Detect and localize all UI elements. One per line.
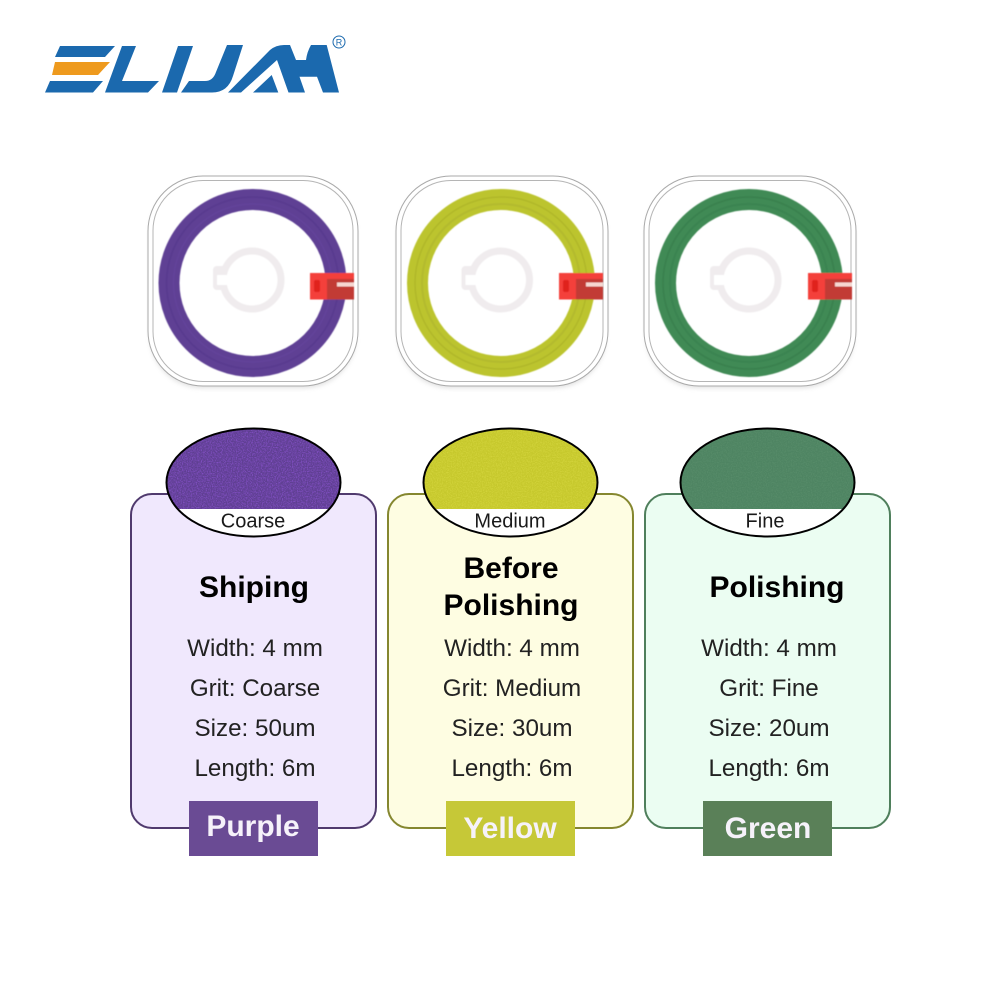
heading: Before	[463, 552, 559, 585]
specs	[187, 635, 323, 782]
specs: Size: 20um	[708, 715, 830, 742]
specs: Grit: Medium	[443, 675, 581, 702]
specs: Length: 6m	[451, 755, 573, 782]
specs: Length: 6m	[194, 755, 316, 782]
panel: purple shiping	[131, 427, 376, 856]
spool: yellow	[396, 176, 608, 388]
swatch: coarse: Coarse	[221, 510, 285, 532]
specs: Grit: Coarse	[190, 675, 320, 702]
specs: Size: 50um	[194, 715, 316, 742]
panel: green polishing	[645, 427, 890, 856]
heading: Shiping	[199, 571, 309, 604]
logo: ELIJAH: R	[336, 38, 343, 48]
heading: Polishing	[444, 589, 578, 622]
heading: Polishing	[710, 571, 844, 604]
color tag: green	[703, 801, 832, 856]
spool: green	[644, 176, 856, 388]
heading	[444, 552, 578, 622]
specs	[443, 635, 581, 782]
swatch: fine	[679, 427, 856, 536]
logo: ELIJAH	[45, 36, 345, 92]
color tag: green: Green	[725, 812, 811, 845]
specs: Size: 30um	[452, 715, 572, 742]
specs: Width: 4 mm	[187, 635, 323, 662]
specs	[701, 635, 837, 782]
swatch: medium: Medium	[474, 510, 546, 532]
color tag: yellow	[446, 801, 575, 856]
panel: yellow before polishing	[388, 427, 633, 856]
color tag: yellow: Yellow	[463, 812, 557, 845]
specs: Length: 6m	[708, 755, 830, 782]
specs: Width: 4 mm	[701, 635, 837, 662]
color tag: purple	[189, 801, 318, 856]
swatch: medium	[422, 427, 599, 536]
color tag: purple: Purple	[206, 810, 300, 843]
specs: Grit: Fine	[719, 675, 819, 702]
swatch: fine: Fine	[746, 510, 784, 532]
swatch: coarse	[165, 427, 342, 536]
spool: purple	[148, 176, 358, 388]
specs: Width: 4 mm	[444, 635, 580, 662]
